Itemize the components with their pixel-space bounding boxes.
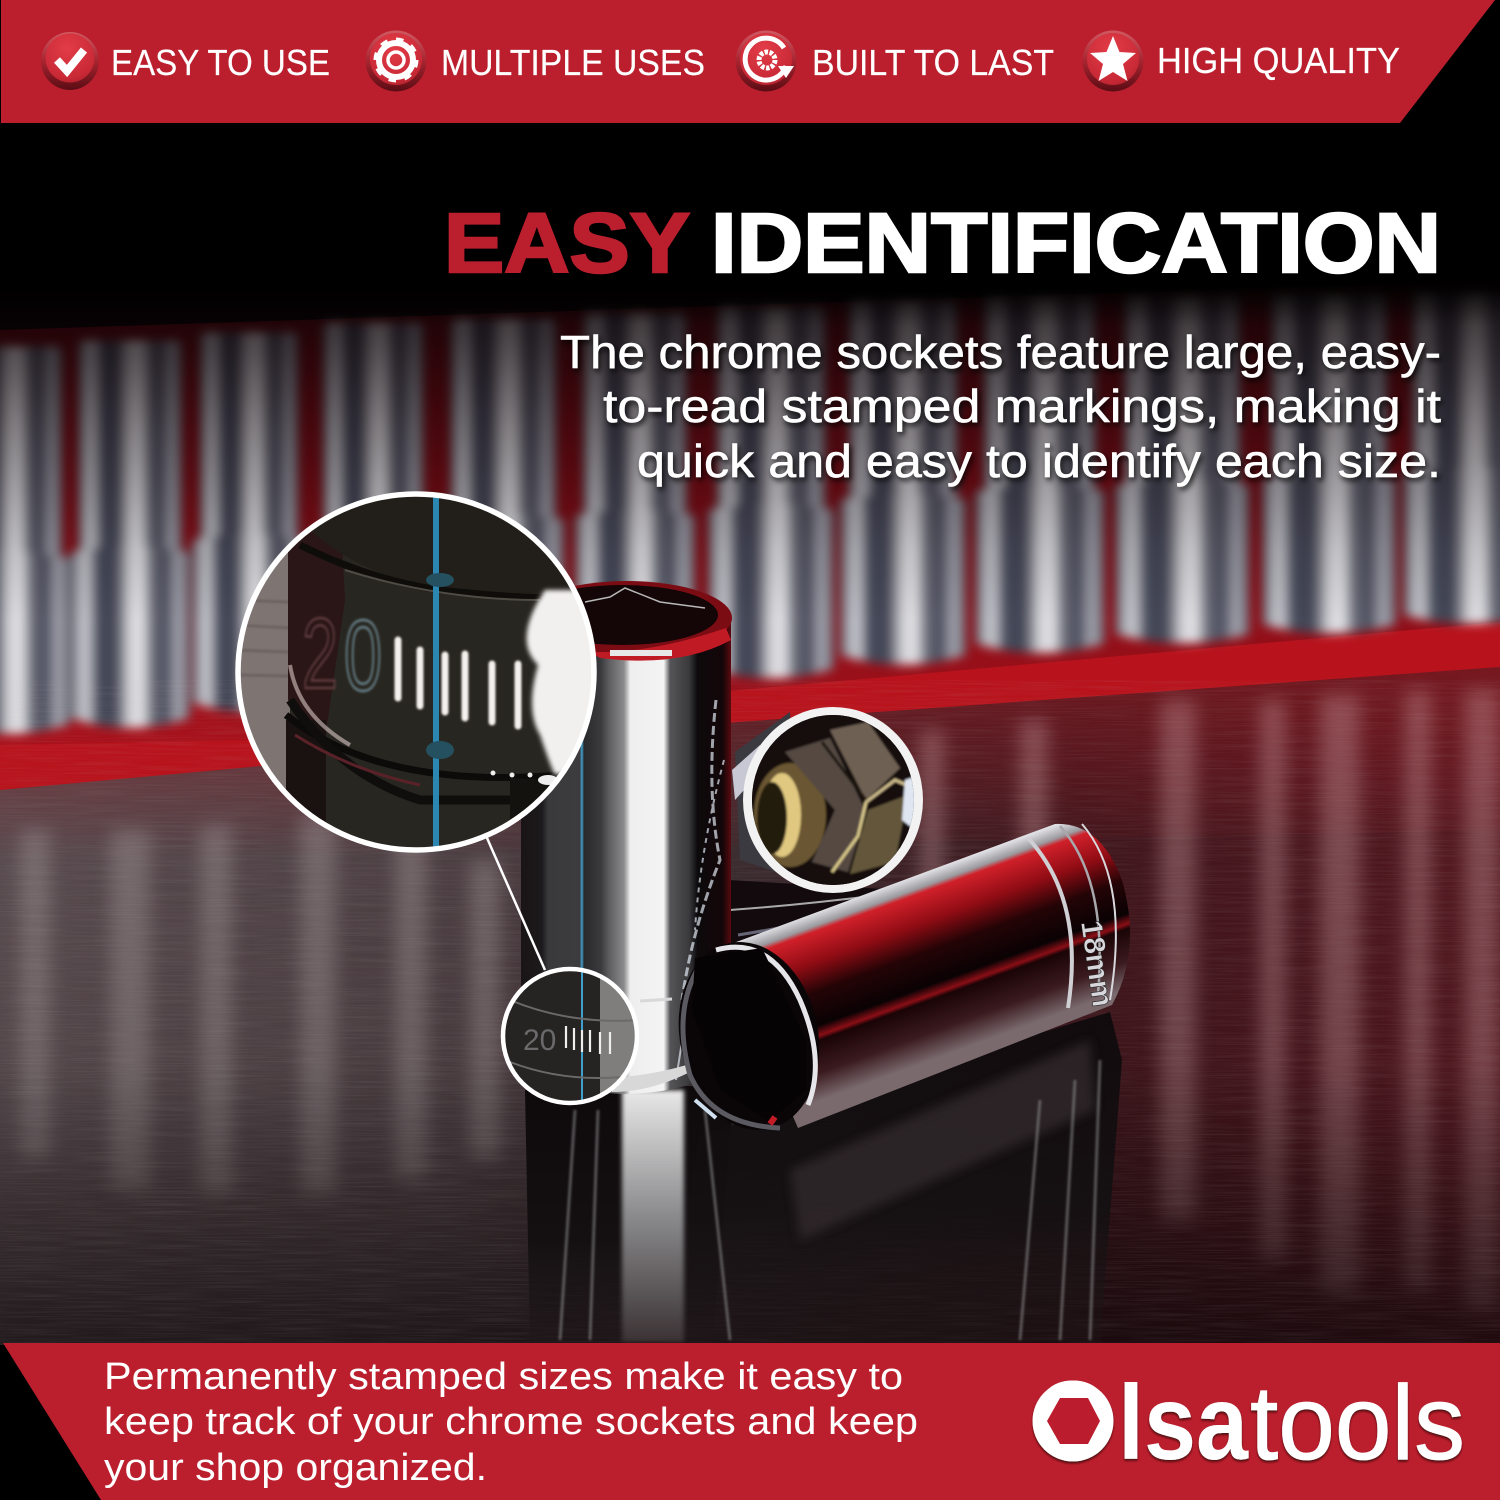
description text block: The chrome sockets feature large, easy- xyxy=(560,326,1441,378)
top red benefits bar xyxy=(1,0,1495,123)
logo: Olsatools: tools xyxy=(1250,1364,1465,1482)
benefit: easy to use xyxy=(41,32,330,90)
socket reflections on the table xyxy=(525,1012,1122,1345)
footer text block: your shop organized. xyxy=(104,1447,487,1489)
benefit: built to last xyxy=(736,30,1054,92)
benefit: multiple uses: MULTIPLE USES xyxy=(441,42,705,83)
icon: gear badge xyxy=(366,30,426,92)
magnified circle showing stamped 20mm marking xyxy=(235,480,600,860)
small highlight circle on stamp: 20 xyxy=(523,1024,556,1057)
bottom red banner xyxy=(3,1343,1500,1500)
socket behind: open end showing hex interior xyxy=(728,707,925,960)
footer text block: keep track of your chrome sockets and keep xyxy=(104,1401,918,1443)
upright chrome socket xyxy=(521,581,732,1094)
logo: Olsatools xyxy=(1032,1359,1465,1482)
lying chrome socket with 18mm stamp xyxy=(662,824,1130,1143)
icon: check mark badge xyxy=(41,32,99,90)
logo: Olsatools: O xyxy=(1033,1359,1113,1482)
icon: star badge xyxy=(1082,30,1144,92)
logo: Olsatools: lsa xyxy=(1118,1364,1249,1482)
connector line from small circle to magnifier xyxy=(487,838,545,970)
small highlight circle on stamp xyxy=(503,965,640,1105)
icon: rotating arrows with gear badge xyxy=(736,30,796,92)
footer text block: Permanently stamped sizes make it easy to xyxy=(104,1356,903,1398)
benefit: high quality xyxy=(1082,30,1400,92)
magnified circle showing stamped 20mm marking: 2 xyxy=(302,598,338,710)
benefit: built to last: BUILT TO LAST xyxy=(812,42,1054,83)
benefit: multiple uses xyxy=(366,30,705,92)
heading: easy identification xyxy=(444,196,1441,290)
description text block xyxy=(560,326,1441,487)
benefit: easy to use: EASY TO USE xyxy=(111,42,330,83)
magnified circle showing stamped 20mm marking: 0 xyxy=(344,600,382,712)
footer text block xyxy=(104,1356,918,1489)
benefit: high quality: HIGH QUALITY xyxy=(1157,40,1400,81)
heading: easy identification: EASY xyxy=(444,196,690,290)
lying chrome socket with 18mm stamp: 18mm xyxy=(1074,918,1119,1009)
heading: easy identification: IDENTIFICATION xyxy=(711,196,1441,290)
description text block: quick and easy to identify each size. xyxy=(637,435,1441,487)
description text block: to-read stamped markings, making it xyxy=(603,380,1441,432)
